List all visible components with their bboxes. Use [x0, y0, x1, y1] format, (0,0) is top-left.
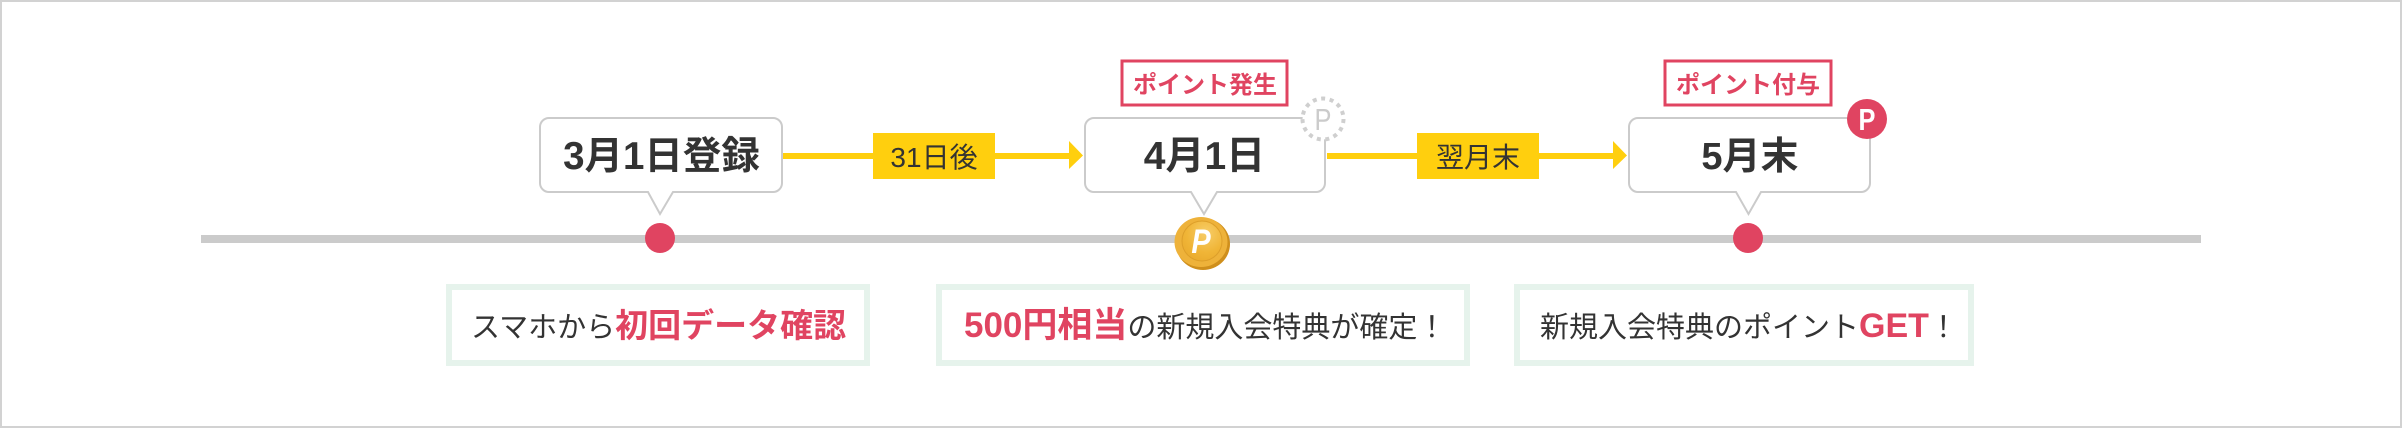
arrow: 31日後: 31日後: [890, 142, 978, 173]
panel: 500円相当の新規入会特典が確定！: 500円相当の新規入会特典が確定！: [964, 306, 1446, 345]
step 3: 5月末: [1629, 61, 1887, 253]
callout: 4月1日: 4月1日: [1144, 135, 1265, 178]
arrow: 翌月末: 翌月末: [1436, 142, 1520, 173]
panel: スマホから初回データ確認: [449, 287, 867, 363]
icon: gold coin: P: [1191, 222, 1212, 261]
icon: pending point: [1302, 98, 1344, 140]
icon: granted point: [1847, 99, 1887, 139]
icon: pending point: P: [1315, 103, 1331, 138]
tag: ポイント発生: [1122, 61, 1287, 105]
arrow: 31日後: [783, 133, 1083, 179]
timeline bar: [201, 235, 2201, 243]
marker dot 3: [1733, 223, 1763, 253]
panel: スマホから初回データ確認: スマホから初回データ確認: [471, 307, 846, 344]
icon: gold coin: [1174, 217, 1230, 270]
arrow: 翌月末: [1327, 133, 1627, 179]
icon: granted point: P: [1859, 103, 1875, 138]
tag: ポイント付与: [1665, 61, 1831, 105]
marker dot 1: [645, 223, 675, 253]
step 2: 4月1日: [1085, 61, 1344, 270]
panel: 新規入会特典のポイントGET！: 新規入会特典のポイントGET！: [1540, 307, 1958, 345]
callout: 3月1日登録: 3月1日登録: [563, 135, 760, 178]
callout: 5月末: 5月末: [1701, 136, 1799, 178]
tag: ポイント付与: ポイント付与: [1676, 72, 1820, 99]
callout: 5月末: [1629, 118, 1870, 214]
callout: 4月1日: [1085, 118, 1325, 214]
callout: 3月1日登録: [540, 118, 782, 214]
panel: 500円相当の新規入会特典が確定！: [939, 287, 1467, 363]
panel: 新規入会特典のポイントGET！: [1517, 287, 1971, 363]
step 1: 3月1日登録: [540, 118, 782, 253]
tag: ポイント発生: ポイント発生: [1133, 72, 1277, 99]
